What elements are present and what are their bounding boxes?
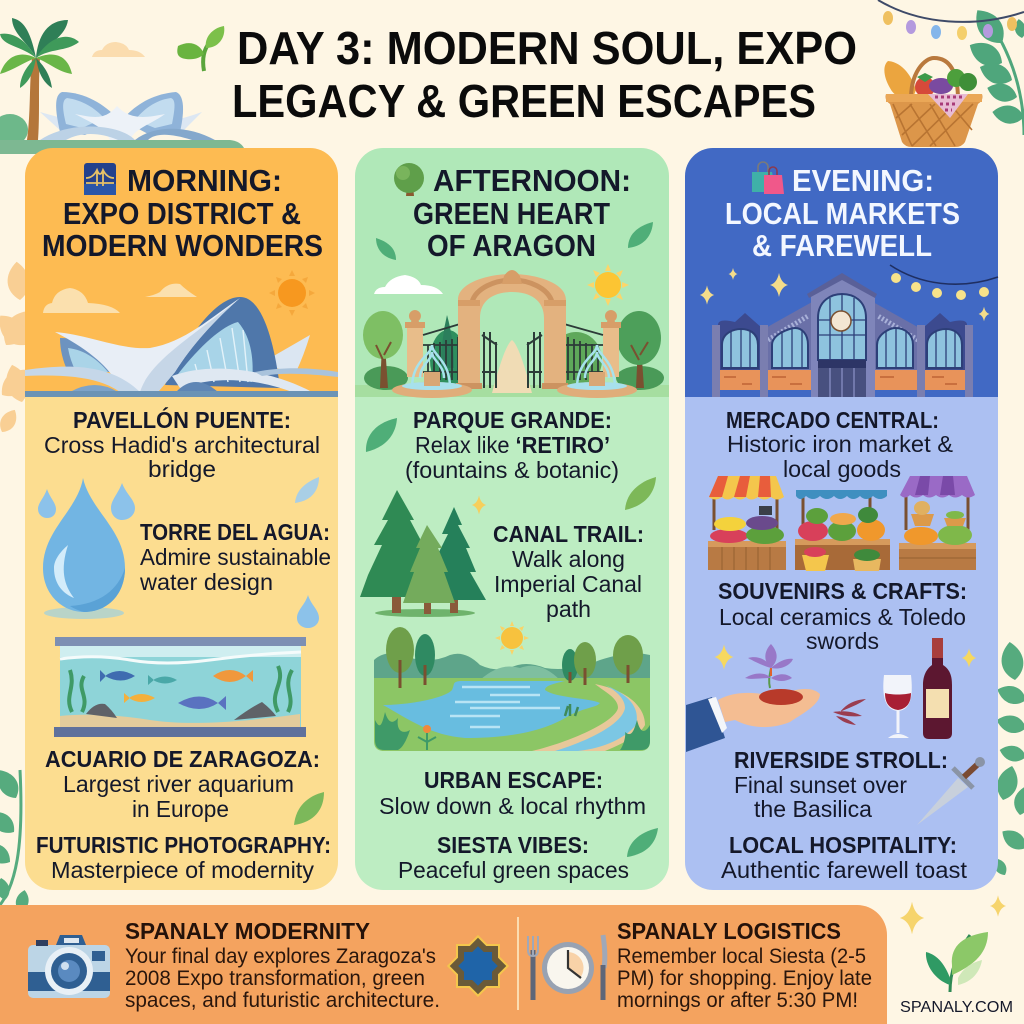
text: Riverside Stroll: the Basilica	[754, 796, 872, 822]
decoration: leaves	[366, 418, 656, 515]
text: Canal Trail	[493, 521, 644, 622]
icon: hand with saffron	[686, 644, 976, 752]
illustration: pine trees	[360, 490, 486, 617]
icon: bridge badge	[84, 163, 116, 195]
text: Urban Escape: URBAN ESCAPE:	[424, 767, 603, 793]
text: Torre del Agua: water design	[139, 569, 273, 595]
icon: shopping bags	[752, 162, 784, 194]
text: Acuario de Zaragoza	[45, 746, 320, 822]
illustration: expo pavilion	[25, 297, 338, 397]
footer text: Spanaly Modernity	[125, 918, 440, 1012]
text: Canal Trail: path	[546, 596, 591, 622]
afternoon heading: GREEN HEART	[413, 196, 610, 231]
icon: leaf	[627, 828, 658, 857]
decoration: green leaves lower left	[0, 766, 42, 934]
footer text: Spanaly Logistics: SPANALY LOGISTICS	[617, 918, 841, 944]
text: Acuario de Zaragoza: Largest river aquarium	[63, 771, 294, 797]
icon: saffron threads	[833, 699, 866, 725]
illustration: fountains	[392, 345, 637, 398]
text: Acuario de Zaragoza: in Europe	[132, 796, 229, 822]
title: DAY 3: MODERN SOUL, EXPO	[237, 22, 857, 74]
text: Canal Trail: Imperial Canal	[494, 571, 642, 597]
text: Futuristic Photography: FUTURISTIC PHOTOGRAPHY:	[36, 832, 331, 858]
text: Siesta Vibes: SIESTA VIBES:	[437, 832, 589, 858]
morning heading: MODERN WONDERS	[42, 228, 323, 263]
icon: picnic basket	[884, 58, 982, 147]
text: Pavellón Puente: bridge	[148, 456, 216, 482]
illustration: aquarium	[54, 637, 306, 737]
morning heading	[42, 163, 323, 263]
icon: fork, clock, knife	[528, 935, 605, 1000]
afternoon heading: OF ARAGON	[427, 228, 596, 263]
text: Acuario de Zaragoza: ACUARIO DE ZARAGOZA:	[45, 746, 320, 772]
text: Souvenirs & Crafts: SOUVENIRS & CRAFTS:	[718, 578, 967, 604]
text: Parque Grande: (fountains & botanic)	[405, 457, 619, 483]
decoration: gold sparkles	[900, 895, 1006, 934]
text: Mercado Central: Historic iron market &	[727, 431, 953, 457]
text: Parque Grande: Relax like ‘RETIRO’	[415, 432, 610, 458]
logo text: SPANALY.COM	[900, 999, 1013, 1016]
text: Futuristic Photography	[36, 832, 331, 883]
text: Pavellón Puente: Cross Hadid's architectural	[44, 432, 320, 458]
text: Pavellón Puente: PAVELLÓN PUENTE:	[73, 406, 291, 433]
decoration: white cloud	[374, 275, 443, 294]
decoration: peach leaves left	[0, 261, 39, 436]
text: Souvenirs & Crafts	[718, 578, 967, 654]
afternoon heading: AFTERNOON:	[433, 163, 631, 198]
text: Local Hospitality	[721, 832, 968, 883]
decoration: clouds	[43, 284, 197, 313]
icon: wine bottle	[923, 638, 952, 739]
decoration: stars and lights	[700, 265, 998, 321]
illustration: park gate	[355, 270, 669, 397]
icon: wine glass	[883, 675, 912, 738]
evening heading: EVENING:	[792, 163, 934, 198]
text: Futuristic Photography: Masterpiece of modernity	[51, 857, 314, 883]
footer text: Spanaly Logistics: PM) for shopping. Enjoy late	[617, 967, 872, 990]
morning heading: EXPO DISTRICT &	[63, 196, 301, 231]
panel: footer	[0, 905, 887, 1024]
panel: evening	[685, 148, 998, 890]
text: Local Hospitality: LOCAL HOSPITALITY:	[729, 832, 957, 858]
text: Local Hospitality: Authentic farewell toast	[721, 857, 968, 883]
text: Siesta Vibes	[398, 832, 629, 883]
text: Torre del Agua: Admire sustainable	[140, 544, 331, 570]
icon: eight-point star	[447, 935, 509, 997]
icon: leaf	[294, 792, 324, 825]
text: Canal Trail: Walk along	[512, 546, 625, 572]
evening heading	[725, 163, 960, 263]
footer text: Spanaly Logistics	[617, 918, 872, 1012]
text: Siesta Vibes: Peaceful green spaces	[398, 857, 629, 883]
text: Torre del Agua: TORRE DEL AGUA:	[140, 519, 330, 545]
footer text: Spanaly Logistics: mornings or after 5:30 PM!	[617, 989, 858, 1012]
icon: pavilion landmark	[40, 92, 215, 140]
text: Parque Grande	[405, 407, 619, 483]
text: Mercado Central: MERCADO CENTRAL:	[726, 407, 939, 433]
text: Riverside Stroll	[734, 747, 948, 822]
icon: orange sun	[269, 270, 315, 316]
title	[232, 22, 857, 127]
evening heading: & FAREWELL	[752, 228, 932, 263]
text: Mercado Central: local goods	[783, 456, 901, 482]
text: Mercado Central	[726, 407, 953, 482]
title: LEGACY & GREEN ESCAPES	[232, 75, 816, 127]
decoration: green ground band	[0, 140, 244, 154]
morning heading: MORNING:	[127, 163, 282, 198]
illustration: lake scene	[374, 621, 650, 751]
icon: toledo sword	[917, 757, 985, 825]
icon: tree	[394, 163, 424, 196]
text: Souvenirs & Crafts: swords	[806, 628, 879, 654]
decoration: green leaves top right	[965, 3, 1024, 135]
panel: morning	[25, 148, 338, 890]
text: Urban Escape	[379, 767, 646, 819]
decoration: string lights	[878, 0, 1024, 40]
text: Parque Grande: PARQUE GRANDE:	[413, 407, 612, 433]
text: Canal Trail: CANAL TRAIL:	[493, 521, 644, 547]
decoration: leaves	[376, 222, 653, 260]
panel: afternoon	[355, 148, 669, 890]
footer text: Spanaly Modernity: 2008 Expo transformation, green	[125, 967, 425, 990]
afternoon heading	[413, 163, 631, 263]
icon: camera	[28, 935, 110, 998]
icon: palm tree	[0, 18, 79, 146]
decoration: green leaves right	[991, 640, 1024, 878]
footer text: Spanaly Modernity: SPANALY MODERNITY	[125, 918, 370, 944]
illustration: market stalls	[708, 476, 976, 571]
icon: green sprout	[177, 26, 224, 71]
text: Riverside Stroll: RIVERSIDE STROLL:	[734, 747, 948, 773]
logo: Spanaly sprout	[926, 932, 988, 992]
footer text: Spanaly Modernity: Your final day explores Zaragoza's	[125, 945, 436, 968]
icon: water drops	[38, 477, 319, 628]
icon: yellow sun	[587, 264, 629, 306]
text: Pavellón Puente	[44, 406, 320, 482]
text: Riverside Stroll: Final sunset over	[734, 772, 907, 798]
text: Torre del Agua	[139, 519, 331, 595]
text: Souvenirs & Crafts: Local ceramics & Toledo	[719, 604, 966, 630]
footer text: Spanaly Logistics: Remember local Siesta (2-5	[617, 945, 866, 968]
footer text: Spanaly Modernity: spaces, and futuristic architecture.	[125, 989, 440, 1012]
text: Urban Escape: Slow down & local rhythm	[379, 793, 646, 819]
divider	[517, 917, 519, 1010]
illustration: central market	[712, 273, 973, 397]
evening heading: LOCAL MARKETS	[725, 196, 960, 231]
decoration: peach cloud	[92, 42, 145, 57]
